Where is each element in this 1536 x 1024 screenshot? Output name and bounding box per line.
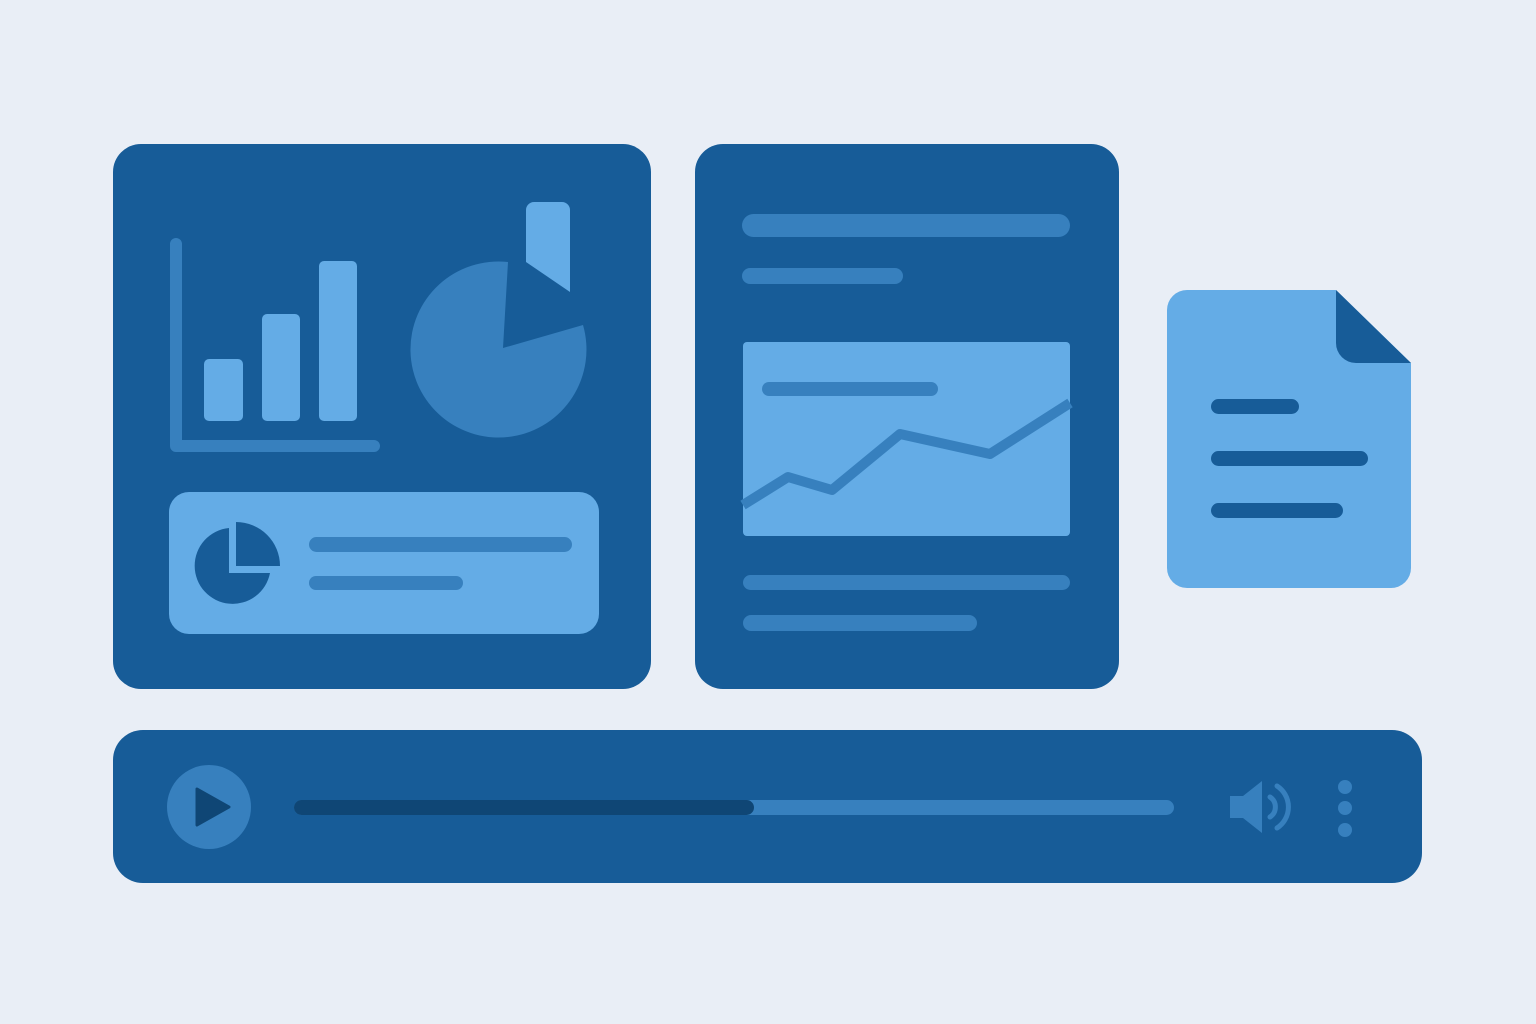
icon: play button xyxy=(167,765,251,849)
progress bar xyxy=(294,800,1174,815)
icon: document xyxy=(1167,290,1411,588)
panel: report xyxy=(695,144,1119,689)
pie chart xyxy=(410,202,586,437)
icon: more menu xyxy=(1338,780,1352,837)
panel: analytics dashboard xyxy=(113,144,651,689)
icon: mini pie xyxy=(195,522,280,604)
line chart xyxy=(743,342,1070,536)
summary card xyxy=(169,492,599,634)
bar chart xyxy=(176,244,374,446)
panel: media player xyxy=(113,730,1422,883)
icon: speaker xyxy=(1230,781,1288,833)
